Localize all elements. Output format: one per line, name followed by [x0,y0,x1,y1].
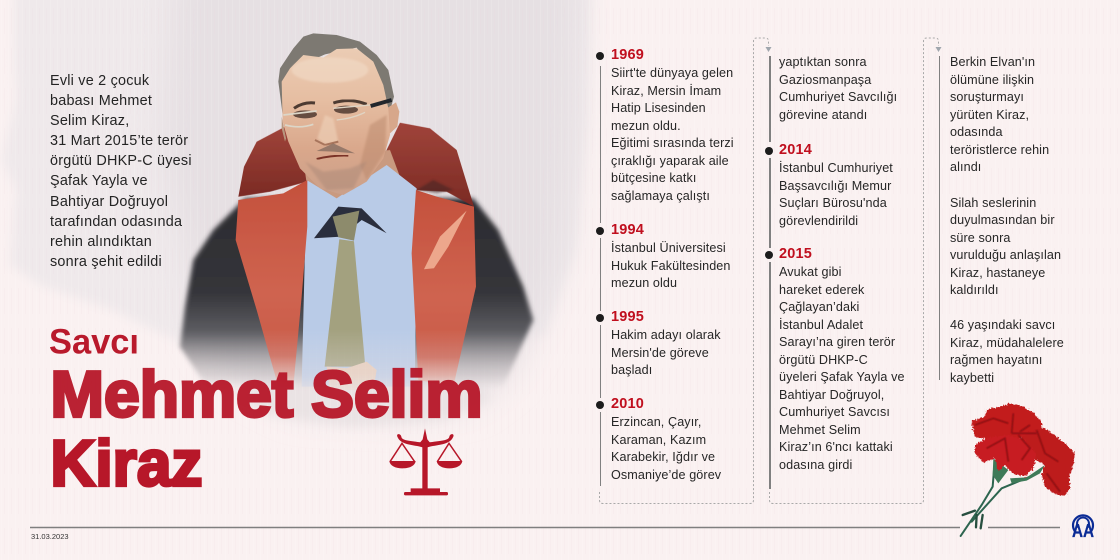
paragraph: investigation: alındı [950,160,981,174]
hand [327,362,377,390]
paragraph: death: rağmen hayatını [950,353,1043,367]
1995 entry: Hakim adayı olarak [611,328,721,342]
1969 entry: mezun oldu. [611,118,681,132]
hair [278,33,394,117]
1994 entry: İstanbul Üniversitesi [611,241,726,255]
timeline column 1 [596,47,734,486]
red lapels [236,180,307,387]
1995 entry: başladı [611,363,652,377]
calyxes [993,458,1008,483]
2014 entry: İstanbul Cumhuriyet [779,161,893,175]
1969 entry: çıraklığı yaparak aile [611,154,729,168]
paragraph: investigation: ölümüne ilişkin [950,72,1034,86]
paragraph: investigation: teröristlerce rehin [950,142,1049,156]
2010 entry: 2010 [611,396,644,412]
1995 entry: Mersin'de göreve [611,346,709,360]
1969 entry: Hatip Lisesinden [611,101,706,115]
stems [961,470,1032,536]
intro text: Selim Kiraz, [50,113,129,129]
paragraph: investigation: odasında [950,125,1003,139]
date: 31.03.2023 [31,532,69,541]
face [282,48,390,195]
intro text: Şafak Yayla ve [50,173,148,189]
continued text: Gaziosmanpaşa [779,72,871,86]
continued text: Cumhuriyet Savcılığı [779,90,897,104]
1995 entry: 1995 [611,309,644,325]
paragraph: gunshots [950,196,1061,297]
2014 entry: 2014 [779,142,812,158]
2015 entry: örgütü DHKP-C [779,352,868,366]
title line: Savcı: Savcı [49,322,139,362]
paragraph: gunshots: süre sonra [950,230,1011,244]
title line: Kiraz: Kiraz [50,426,202,500]
shirt [302,165,417,387]
1969 entry: Kiraz, Mersin İmam [611,84,721,98]
2015 entry: Mehmet Selim [779,422,861,436]
intro text: Bahtiyar Doğruyol [50,194,168,210]
2014 entry: Başsavcılığı Memur [779,178,891,192]
1994 entry: Hukuk Fakültesinden [611,258,731,272]
flower: lower left [975,435,1037,477]
glasses [283,100,392,127]
2014 entry: Suçları Bürosu'nda [779,196,887,210]
2015 entry: odasına girdi [779,458,852,472]
1994 entry [596,222,731,311]
2015 entry: Sarayı’na giren terör [779,335,895,349]
2015 entry: 2015 [779,246,812,262]
paragraph: gunshots: duyulmasından bir [950,213,1055,227]
moustache shadow [317,143,355,153]
continued text: görevine atandı [779,108,867,122]
ear [388,102,400,134]
1969 entry: Eğitimi sırasında terzi [611,136,734,150]
2015 entry: Çağlayan’daki [779,300,859,314]
intro text: tarafından odasında [50,214,182,230]
2010 entry [596,396,721,486]
mouth [317,156,348,159]
paragraph: investigation: soruşturmayı [950,90,1024,104]
intro text [50,73,192,270]
timeline column 2 [765,55,905,489]
paragraph: investigation: Berkin Elvan'ın [950,55,1035,69]
title line: Mehmet Selim: Mehmet Selim [50,358,482,430]
cheek shading [360,115,387,180]
continued text [769,55,897,142]
forehead light [292,57,368,83]
head [278,33,399,195]
2015 entry: Kiraz’ın 6'ncı kattaki [779,440,893,454]
2015 entry [765,246,905,489]
intro text: sonra şehit edildi [50,254,162,270]
2015 entry: İstanbul Adalet [779,318,863,332]
paragraph: gunshots: kaldırıldı [950,283,999,297]
1969 entry: bütçesine katkı [611,171,697,185]
paragraph: death: 46 yaşındaki savcı [950,318,1055,332]
paragraph: investigation [950,55,1049,174]
1995 entry [596,309,721,398]
timeline column 3 [939,55,1064,384]
paragraph: investigation: yürüten Kiraz, [950,108,1029,122]
2010 entry: Karaman, Kazım [611,432,706,446]
2015 entry: Avukat gibi [779,265,841,279]
black robe shoulders [180,198,533,387]
brows [294,101,367,108]
robe collar [238,127,313,197]
1969 entry: 1969 [611,47,644,63]
1969 entry: sağlamaya çalıştı [611,188,710,202]
eye sockets [293,110,317,118]
paragraph: death: kaybetti [950,370,994,384]
petal shadows [975,413,1060,492]
intro text: Evli ve 2 çocuk [50,73,149,89]
logo: Anadolu Agency [1072,514,1094,539]
flower: right [1020,425,1075,496]
paragraph: death: Kiraz, müdahalelere [950,336,1064,350]
paragraph: gunshots: Kiraz, hastaneye [950,266,1045,280]
2014 entry: görevlendirildi [779,214,858,228]
1969 entry [596,47,734,223]
2015 entry: üyeleri Şafak Yayla ve [779,370,905,384]
2014 entry [765,142,893,248]
collar shadow [314,207,387,238]
intro text: rehin alındıktan [50,234,152,250]
tie [333,211,359,241]
paragraph: gunshots: Silah seslerinin [950,196,1036,210]
2015 entry: hareket ederek [779,282,864,296]
intro text: örgütü DHKP-C üyesi [50,153,192,169]
2015 entry: Cumhuriyet Savcısı [779,405,890,419]
flower: top [972,403,1042,443]
1969 entry: Siirt'te dünyaya gelen [611,66,733,80]
neck [305,150,400,198]
1994 entry: 1994 [611,222,644,238]
intro text: 31 Mart 2015’te terör [50,133,188,149]
paragraph: death [950,318,1064,384]
2010 entry: Osmaniye’de görev [611,468,721,482]
2010 entry: Karabekir, Iğdır ve [611,450,715,464]
nose [317,115,338,144]
paragraph: gunshots: vurulduğu anlaşılan [950,248,1061,262]
2010 entry: Erzincan, Çayır, [611,415,702,429]
portrait of Mehmet Selim Kiraz [177,33,536,390]
continued text: yaptıktan sonra [779,55,867,69]
1994 entry: mezun oldu [611,276,677,290]
intro text: babası Mehmet [50,93,152,109]
2015 entry: Bahtiyar Doğruyol, [779,388,884,402]
